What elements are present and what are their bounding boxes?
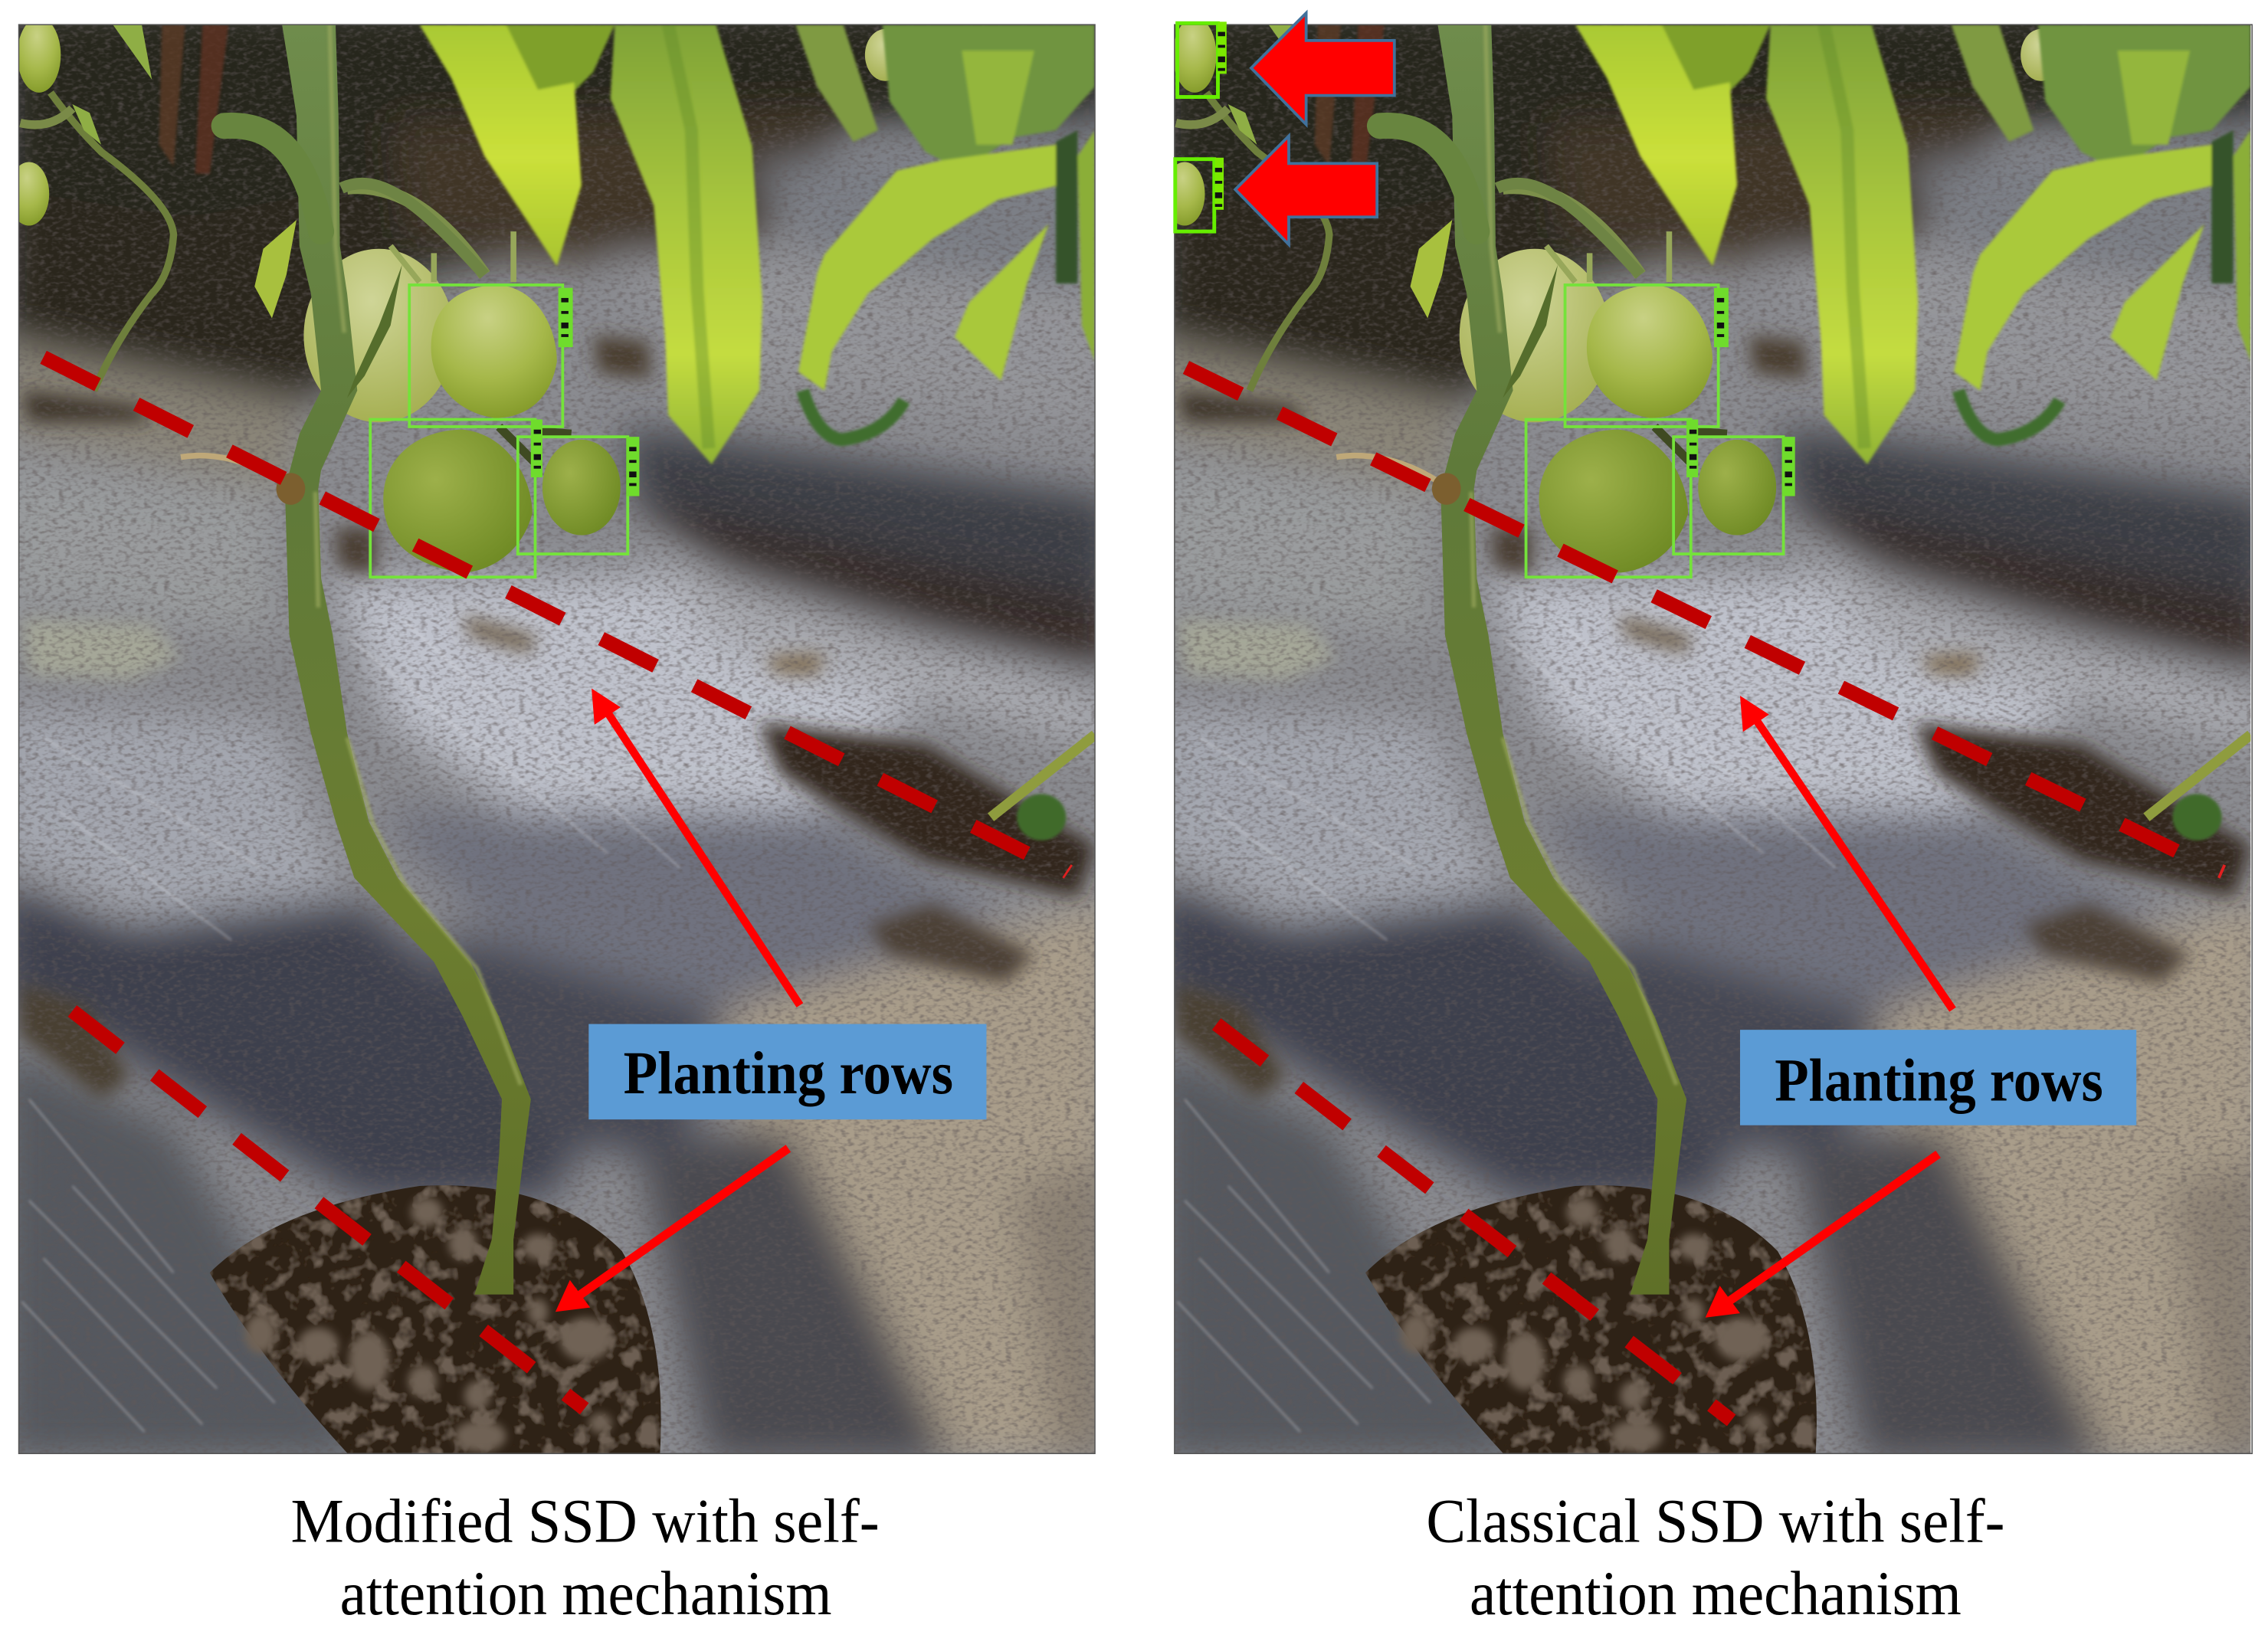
photo: left panel [0, 0, 1114, 1461]
arrow: to lower row [556, 1148, 788, 1312]
caption: classical SSD: Classical SSD with self- [1426, 1486, 2004, 1555]
panel outline [19, 25, 1095, 1453]
detection boxes: false positives at top left [1175, 21, 1227, 231]
dashed line: lower planting row [72, 1011, 585, 1409]
block arrow: lower false positive [1235, 136, 1377, 244]
dashed line: upper planting row [1186, 368, 2181, 853]
detection boxes: tomatoes [370, 285, 639, 577]
caption: classical SSD: attention mechanism [1470, 1559, 1962, 1628]
panel outline [1175, 25, 2252, 1453]
label box: planting rows: Planting rows [1775, 1047, 2103, 1115]
caption: modified SSD: attention mechanism [340, 1559, 831, 1628]
arrow: to upper row [1740, 696, 1952, 1010]
label box: planting rows: Planting rows [624, 1040, 953, 1107]
panel: modified SSD result [0, 0, 1114, 1628]
dashed line: lower planting row [1217, 1024, 1732, 1420]
caption: modified SSD: Modified SSD with self- [290, 1486, 880, 1555]
photo: right panel [1155, 0, 2268, 1461]
dashed line: upper planting row [44, 357, 1027, 853]
red tick [2219, 865, 2224, 878]
block arrow: upper false positive [1251, 13, 1395, 124]
label box: planting rows [1740, 1030, 2136, 1125]
detection boxes: tomatoes [1526, 285, 1795, 577]
arrow: to upper row [592, 689, 800, 1005]
panel: classical SSD result [1155, 0, 2268, 1628]
red tick [1064, 865, 1072, 878]
label box: planting rows [588, 1024, 986, 1119]
arrow: to lower row [1706, 1154, 1939, 1318]
